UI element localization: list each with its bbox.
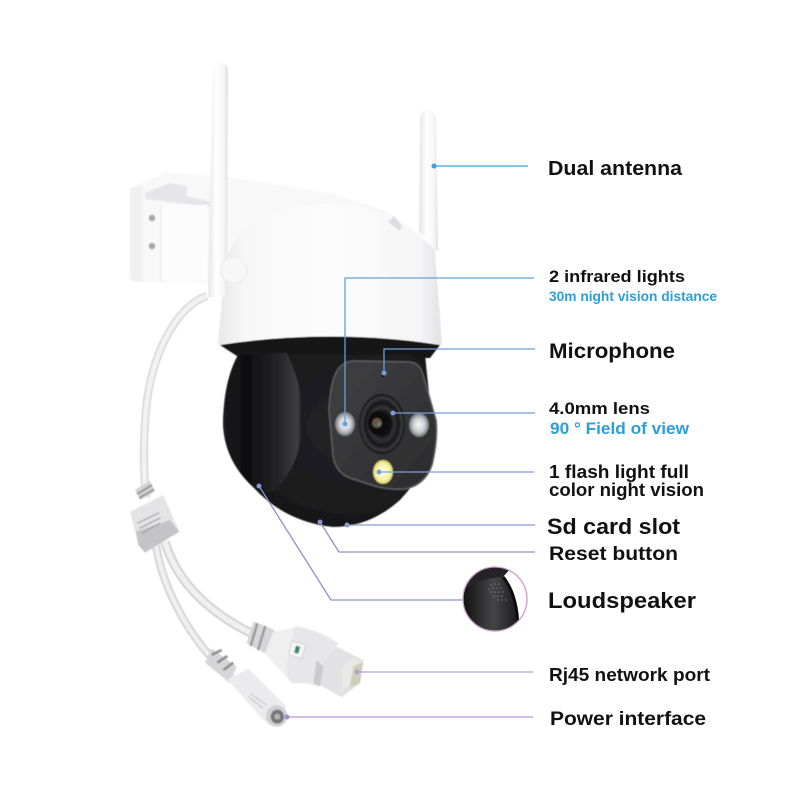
wall bracket bbox=[130, 172, 425, 300]
label: rj45 network port: Rj45 network port bbox=[549, 665, 710, 685]
label: 2 infrared lights bbox=[549, 267, 717, 304]
right antenna bbox=[419, 110, 438, 252]
main cable bbox=[144, 296, 207, 498]
infographic canvas bbox=[130, 64, 717, 727]
label: flash light: color night vision bbox=[549, 480, 704, 500]
white dome housing bbox=[218, 205, 442, 345]
dome recess bbox=[388, 216, 402, 231]
RJ45 connector bbox=[247, 622, 363, 697]
callout line: infrared lights bbox=[342, 278, 534, 426]
label: loudspeaker: Loudspeaker bbox=[548, 588, 696, 613]
right infrared light bbox=[409, 413, 429, 437]
callout line: loudspeaker bbox=[256, 484, 462, 600]
callout line: flash light bbox=[376, 470, 534, 474]
label: flash light bbox=[549, 462, 704, 500]
flash light bbox=[373, 460, 393, 484]
left infrared light bbox=[335, 412, 355, 436]
callout line: reset button bbox=[318, 520, 535, 552]
loudspeaker detail inset bbox=[463, 567, 527, 631]
connectors and split cables bbox=[130, 481, 363, 727]
power connector bbox=[205, 648, 287, 727]
callout line: power interface bbox=[284, 714, 533, 720]
label: microphone: Microphone bbox=[549, 340, 675, 363]
callout line: sd card slot bbox=[344, 522, 535, 528]
label: dual antenna: Dual antenna bbox=[548, 158, 683, 180]
cable joint bbox=[221, 257, 247, 283]
dark collar band bbox=[220, 336, 440, 358]
speaker grille dots bbox=[488, 583, 507, 601]
black ball bbox=[223, 355, 434, 527]
callout line: microphone bbox=[382, 349, 535, 376]
callout line: network port bbox=[354, 670, 533, 674]
callout line: dual antenna bbox=[432, 164, 528, 168]
cable to network port bbox=[165, 542, 252, 633]
callout line: lens bbox=[390, 410, 535, 416]
cable to power connector bbox=[156, 545, 213, 660]
label: 4.0mm lens bbox=[549, 399, 690, 438]
camera product image bbox=[130, 63, 442, 727]
label: 4.0mm lens: 90 ° Field of view bbox=[550, 419, 690, 438]
cable splitter bbox=[130, 481, 179, 553]
side arm bbox=[223, 353, 303, 492]
face plate bbox=[329, 361, 436, 489]
label: 2 infrared lights: 2 infrared lights bbox=[549, 267, 685, 286]
camera lens bbox=[359, 394, 405, 454]
label: power interface: Power interface bbox=[550, 709, 706, 730]
microphone hole bbox=[382, 375, 384, 377]
label: reset button: Reset button bbox=[549, 544, 678, 565]
label: 4.0mm lens: 4.0mm lens bbox=[549, 399, 650, 418]
left antenna bbox=[208, 63, 228, 297]
label: sd card slot: Sd card slot bbox=[547, 514, 681, 539]
label: 2 infrared lights: 30m night vision distance bbox=[549, 289, 717, 304]
label: flash light: 1 flash light full bbox=[549, 462, 689, 482]
